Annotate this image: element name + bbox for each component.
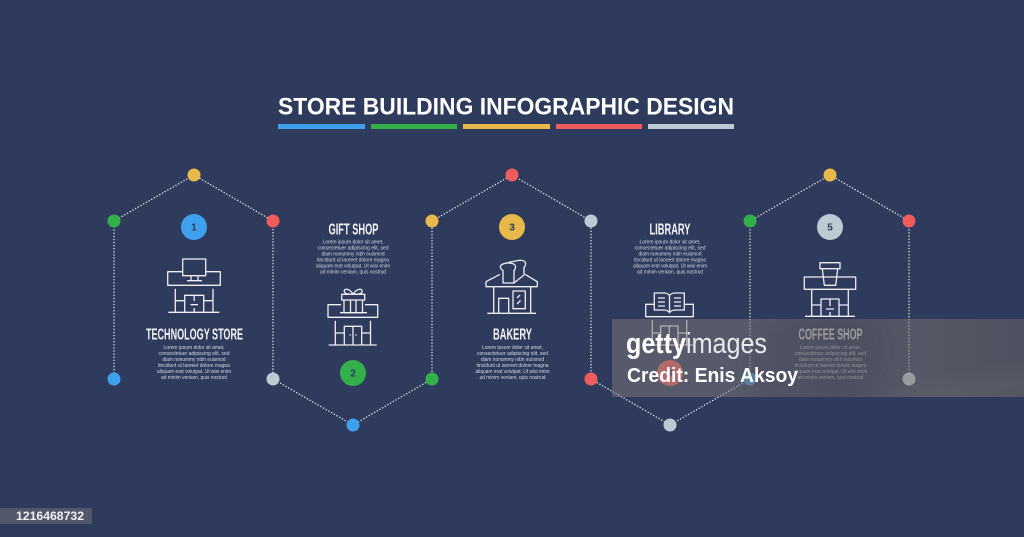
icon: technology store	[168, 259, 220, 312]
dotted connector line	[114, 175, 909, 425]
number badge 2: 2	[350, 368, 356, 380]
text: coffee shop description: tincidunt ut laoreet dolore magna	[794, 363, 867, 369]
text: library description: consectetuer adipiscing elit, sed	[634, 246, 706, 252]
heading: bakery: BAKERY	[493, 326, 532, 344]
text: library description: Lorem ipsum dolor sit amet,	[640, 240, 701, 246]
text: bakery description: aliquam erat volutpat. Ut wisi enim	[476, 369, 550, 375]
text: coffee shop description: ad minim veniam, quis nostrud	[798, 375, 864, 381]
panel: bakery	[476, 214, 550, 381]
text: technology store description: tincidunt ut laoreet dolore magna	[158, 363, 231, 369]
text: coffee shop description: consectetuer adipiscing elit, sed	[795, 351, 866, 357]
panel: library	[633, 222, 707, 386]
text: technology store description: Lorem ipsum dolor sit amet,	[164, 345, 225, 351]
image id tag: 1216468732	[16, 509, 84, 523]
text: coffee shop description: diam nonummy nibh euismod	[799, 357, 862, 363]
heading: coffee shop: COFFEE SHOP	[798, 326, 863, 344]
icon: coffee shop	[804, 263, 856, 316]
text: bakery description	[476, 345, 550, 381]
watermark logo: gettyimages	[626, 328, 767, 360]
text: library description: ad minim veniam, quis nostrud	[637, 270, 703, 276]
text: technology store description	[157, 345, 231, 381]
text: technology store description: consectetuer adipiscing elit, sed	[158, 351, 230, 357]
number badge 1	[181, 214, 207, 240]
text: technology store description: diam nonummy nibh euismod	[162, 357, 226, 363]
icon: library	[646, 293, 693, 345]
text: gift shop description: ad minim veniam, quis nostrud	[320, 270, 386, 276]
text: bakery description: consectetuer adipiscing elit, sed	[477, 351, 548, 357]
number badge 4	[657, 360, 683, 386]
text: library description: diam nonummy nibh euismod	[638, 252, 702, 258]
watermark band	[612, 315, 1024, 400]
text: library description	[633, 240, 707, 276]
title: STORE BUILDING INFOGRAPHIC DESIGN	[278, 94, 734, 120]
text: bakery description: ad minim veniam, quis nostrud	[480, 375, 546, 381]
text: gift shop description: consectetuer adipiscing elit, sed	[318, 246, 388, 252]
text: bakery description: tincidunt ut laoreet dolore magna	[476, 363, 549, 369]
watermark credit: Credit: Enis Aksoy	[627, 364, 799, 387]
number badge 2	[340, 360, 366, 386]
heading: library: LIBRARY	[650, 222, 691, 238]
heading: technology store: TECHNOLOGY STORE	[146, 326, 243, 344]
text: coffee shop description: aliquam erat volutpat. Ut wisi enim	[794, 369, 868, 375]
number badge 1: 1	[191, 222, 197, 234]
text: gift shop description: tincidunt ut laoreet dolore magna	[317, 258, 390, 264]
text: coffee shop description: Lorem ipsum dolor sit amet,	[800, 345, 861, 351]
text: gift shop description	[316, 240, 390, 276]
icon: gift shop	[328, 289, 378, 345]
text: bakery description: Lorem ipsum dolor sit amet,	[482, 345, 543, 351]
image id tag	[0, 508, 92, 524]
text: bakery description: diam nonummy nibh euismod	[481, 357, 544, 363]
panel: technology store	[146, 214, 243, 381]
text: coffee shop description	[794, 345, 868, 381]
text: gift shop description: diam nonummy nibh euismod	[322, 252, 384, 258]
text: library description: tincidunt ut laoreet dolore magna	[634, 258, 707, 264]
icon: bakery	[486, 260, 537, 313]
panel: coffee shop	[794, 214, 868, 381]
number badge 5	[817, 214, 843, 240]
connector nodes	[108, 168, 916, 432]
title colour bars	[278, 124, 734, 129]
text: technology store description: ad minim veniam, quis nostrud	[161, 375, 227, 381]
number badge 3: 3	[509, 222, 515, 234]
text: gift shop description: Lorem ipsum dolor sit amet,	[322, 240, 384, 246]
text: library description: aliquam erat volutpat. Ut wisi enim	[633, 264, 707, 270]
panel: gift shop	[316, 222, 390, 386]
number badge 4: 4	[667, 368, 673, 380]
heading: gift shop: GIFT SHOP	[328, 222, 379, 238]
text: gift shop description: aliquam erat volutpat. Ut wisi enim	[316, 264, 390, 270]
number badge 5: 5	[827, 222, 833, 234]
number badge 3	[499, 214, 525, 240]
text: technology store description: aliquam erat volutpat. Ut wisi enim	[157, 369, 231, 375]
